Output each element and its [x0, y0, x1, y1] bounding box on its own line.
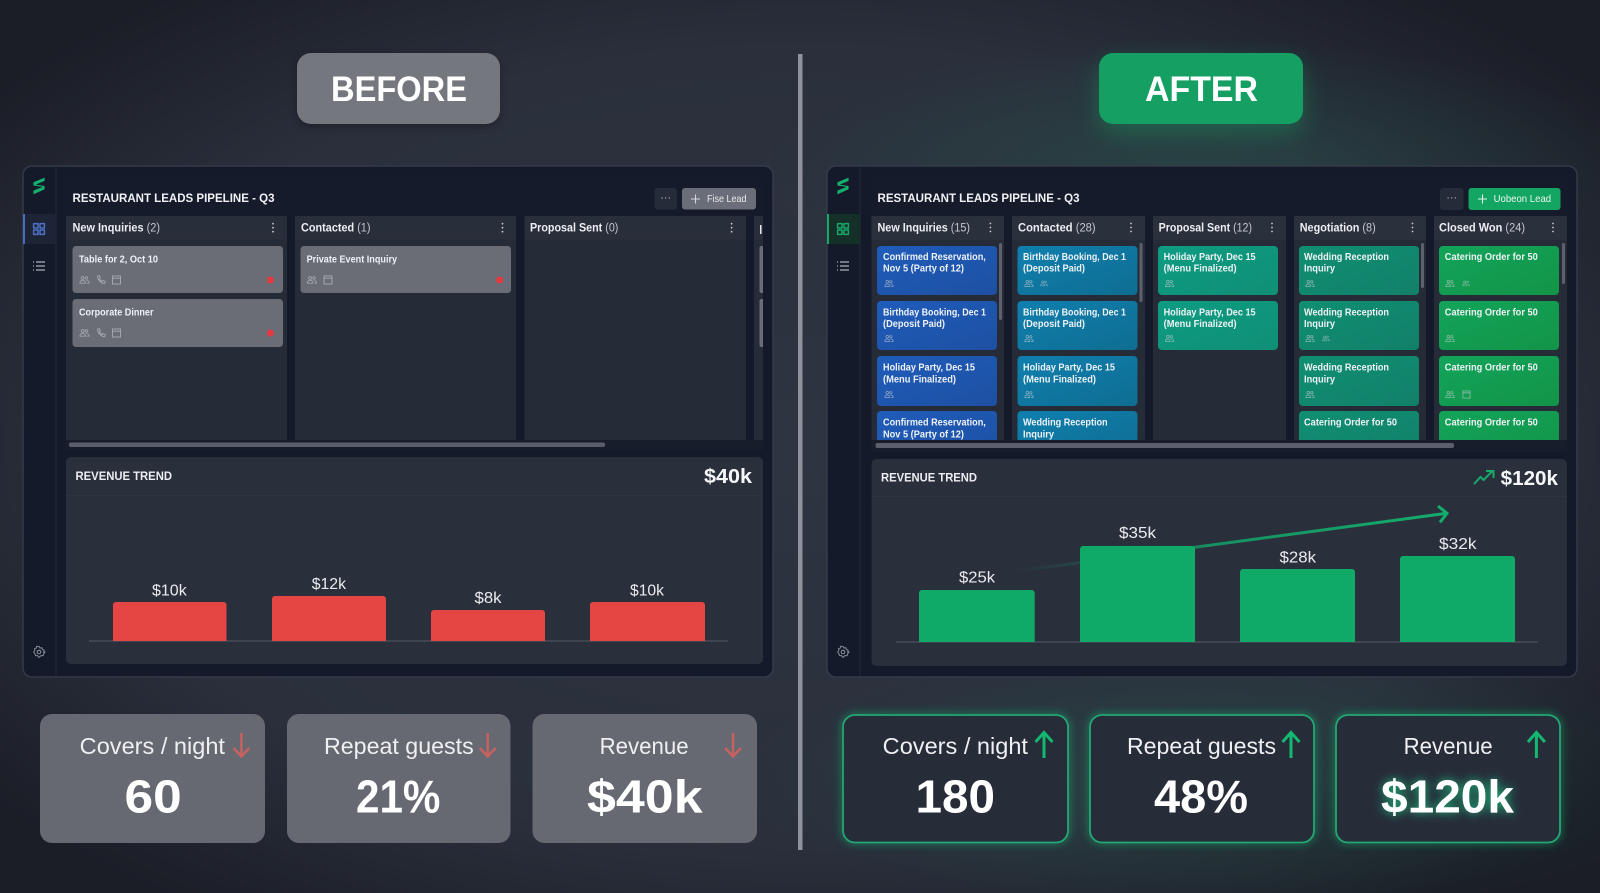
- cards: closed won: Catering Order for 50: [1445, 417, 1538, 429]
- column backgrounds and headers: Closed Won (24): [1439, 223, 1525, 235]
- kpi: covers per night after: 180: [916, 771, 995, 823]
- cards: closed won: Catering Order for 50: [1445, 251, 1538, 263]
- column backgrounds and headers: New Inquiries (15): [878, 223, 970, 235]
- after badge: AFTER: [1145, 70, 1258, 109]
- bar chart: before revenue: [89, 576, 728, 641]
- kpi: covers per night before: [40, 714, 265, 843]
- cards: proposal sent: Holiday Party, Dec 15: [1164, 251, 1256, 263]
- kpi: revenue before: Revenue: [600, 733, 689, 759]
- cards: proposal sent: [1158, 246, 1278, 350]
- pipeline title bar: ···: [660, 192, 671, 204]
- cards: new inquiries: (Menu Finalized): [883, 373, 956, 385]
- kpi: revenue before: [532, 714, 757, 843]
- panel: revenue trend before: REVENUE TREND: [76, 471, 172, 483]
- column: new inquiries: [66, 216, 287, 440]
- column: proposal sent: [524, 216, 746, 440]
- sidebar: [23, 167, 56, 676]
- column backgrounds and headers: Contacted (28): [1018, 223, 1096, 235]
- cards: contacted: (Deposit Paid): [1023, 263, 1085, 275]
- kpi: covers per night before: 60: [124, 771, 182, 823]
- kanban columns: [872, 216, 1567, 460]
- column: proposal sent: Proposal Sent (0): [530, 223, 619, 235]
- cards: negotiation: Wedding Reception: [1304, 251, 1389, 263]
- kpi: repeat guests after: 48%: [1154, 771, 1248, 823]
- kpi: repeat guests before: 21%: [356, 771, 440, 823]
- cards: contacted: [1018, 246, 1138, 460]
- cards: negotiation: [1299, 246, 1419, 460]
- kanban columns: [66, 216, 766, 440]
- cards: new inquiries: (Deposit Paid): [883, 318, 945, 330]
- cards: new inquiries: [877, 246, 997, 460]
- cards: new inquiries: Holiday Party, Dec 15: [883, 362, 975, 374]
- pipeline title bar: [872, 178, 1567, 216]
- kpi: revenue before: $40k: [587, 771, 703, 823]
- panel: revenue trend before: $40k: [704, 466, 753, 488]
- icon: trend up: [1474, 471, 1494, 484]
- kpi: revenue after: Revenue: [1404, 733, 1493, 759]
- arrow: revenue growth trend: [1011, 506, 1447, 572]
- kpi: repeat guests after: Repeat guests: [1127, 733, 1276, 759]
- after badge: [1099, 53, 1303, 132]
- horizontal scrollbar: [66, 440, 763, 450]
- panel: revenue trend before: [66, 457, 763, 664]
- cards: negotiation: Wedding Reception: [1304, 306, 1389, 318]
- cards: contacted: Holiday Party, Dec 15: [1023, 362, 1115, 374]
- cards: closed won: Catering Order for 50: [1445, 362, 1538, 374]
- cards: contacted: Wedding Reception: [1023, 417, 1108, 429]
- panel: after dashboard: [827, 166, 1577, 677]
- cards: negotiation: Catering Order for 50: [1304, 417, 1397, 429]
- before badge: BEFORE: [331, 70, 467, 109]
- column: contacted: Contacted (1): [301, 223, 371, 235]
- cards: new inquiries: Confirmed Reservation,: [883, 251, 986, 263]
- cards: new inquiries: Nov 5 (Party of 12): [883, 263, 964, 275]
- bar chart: before revenue: $10k: [152, 583, 188, 600]
- column: new inquiries: Corporate Dinner: [79, 307, 154, 319]
- cards: contacted: Birthday Booking, Dec 1: [1023, 306, 1126, 318]
- pipeline title bar: [66, 178, 763, 216]
- kpi: repeat guests after: [1090, 715, 1314, 842]
- pipeline title bar: Fise Lead: [707, 193, 747, 205]
- cards: contacted: Inquiry: [1023, 428, 1054, 440]
- bar chart: after revenue: $25k: [959, 570, 996, 587]
- cards: closed won: [1439, 246, 1559, 460]
- column: new inquiries: New Inquiries (2): [72, 223, 160, 235]
- kpi: covers per night before: Covers / night: [80, 733, 226, 759]
- column: contacted: Private Event Inquiry: [307, 253, 397, 265]
- kpi: repeat guests before: [287, 714, 510, 843]
- bar chart: before revenue: $10k: [630, 583, 665, 600]
- panel: before dashboard: [23, 166, 773, 677]
- column backgrounds and headers: Proposal Sent (12): [1159, 223, 1252, 235]
- bar chart: after revenue: $35k: [1119, 525, 1157, 542]
- cards: closed won: Catering Order for 50: [1445, 306, 1538, 318]
- cards: contacted: Birthday Booking, Dec 1: [1023, 251, 1126, 263]
- kpi: revenue after: $120k: [1381, 771, 1514, 823]
- cards: proposal sent: (Menu Finalized): [1164, 318, 1237, 330]
- kpi: revenue after: $120k: [1381, 771, 1514, 823]
- cards: negotiation: Inquiry: [1304, 318, 1335, 330]
- center divider: [798, 54, 802, 850]
- kpi: covers per night after: [843, 715, 1068, 842]
- column backgrounds and headers: Negotiation (8): [1300, 223, 1376, 235]
- cards: negotiation: Inquiry: [1304, 373, 1335, 385]
- pipeline title bar: ···: [1446, 192, 1457, 204]
- column backgrounds and headers: [872, 216, 1567, 440]
- kpi: repeat guests before: Repeat guests: [324, 733, 474, 759]
- cards: new inquiries: Birthday Booking, Dec 1: [883, 306, 986, 318]
- cards: contacted: (Menu Finalized): [1023, 373, 1096, 385]
- column: new inquiries: Table for 2, Oct 10: [79, 253, 158, 265]
- before badge: [297, 53, 500, 127]
- panel: revenue trend after: [872, 459, 1567, 666]
- dashboard frame: [827, 166, 1577, 677]
- sidebar: [827, 167, 860, 676]
- bar chart: after revenue: $32k: [1439, 536, 1478, 553]
- dashboard frame: [23, 166, 773, 677]
- bar chart: after revenue: [896, 525, 1538, 642]
- cards: contacted: (Deposit Paid): [1023, 318, 1085, 330]
- cards: new inquiries: Confirmed Reservation,: [883, 417, 986, 429]
- column: clipped next column: [754, 216, 763, 440]
- pipeline title bar: RESTAURANT LEADS PIPELINE - Q3: [878, 191, 1080, 205]
- panel: revenue trend after: REVENUE TREND: [881, 473, 977, 485]
- panel: revenue trend after: $120k: [1501, 468, 1559, 490]
- cards: new inquiries: Nov 5 (Party of 12): [883, 428, 964, 440]
- green ambient glow: after side: [740, 40, 1600, 893]
- bar chart: before revenue: $12k: [312, 576, 347, 593]
- column: contacted: [295, 216, 516, 440]
- cards: negotiation: Wedding Reception: [1304, 362, 1389, 374]
- cards: proposal sent: Holiday Party, Dec 15: [1164, 306, 1256, 318]
- bar chart: after revenue: $28k: [1280, 550, 1317, 567]
- bar chart: before revenue: $8k: [474, 590, 503, 607]
- kpi: covers per night after: Covers / night: [883, 733, 1029, 759]
- cards: proposal sent: (Menu Finalized): [1164, 263, 1237, 275]
- pipeline title bar: Uobeon Lead: [1494, 193, 1551, 205]
- cards: negotiation: Inquiry: [1304, 263, 1335, 275]
- pipeline title bar: RESTAURANT LEADS PIPELINE - Q3: [72, 191, 275, 205]
- kpi: revenue after: [1336, 715, 1560, 842]
- horizontal scrollbar: [872, 440, 1567, 452]
